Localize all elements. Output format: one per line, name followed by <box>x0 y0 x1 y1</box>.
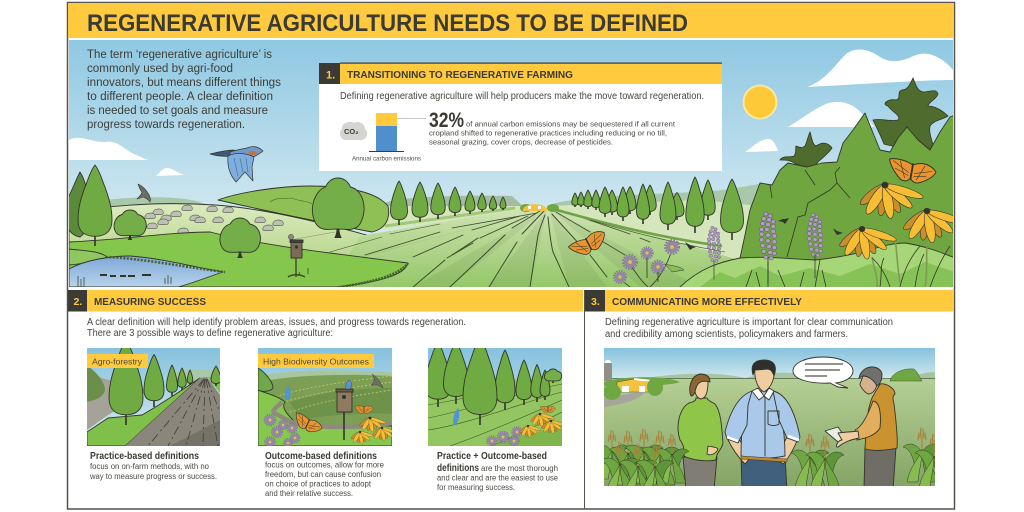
hedge inner lines <box>770 167 850 257</box>
far barn <box>520 204 559 212</box>
number badge 1 <box>319 63 340 84</box>
lead text 3: Defining regenerative agriculture is important for clear communication <box>605 317 893 328</box>
caption: outcome-based: focus on outcomes, allow for more <box>265 460 384 470</box>
lead text 2 <box>87 317 466 339</box>
lead text 2: There are 3 possible ways to define regenerative agriculture: <box>87 328 333 339</box>
person: man in blue shirt <box>725 360 800 490</box>
panel: farm landscape scene <box>68 40 964 290</box>
black-eyed susans <box>746 181 964 287</box>
icon: CO2 cloud <box>340 122 367 140</box>
icon: CO2 cloud: CO₂ <box>344 127 359 136</box>
poplar row left <box>390 181 506 225</box>
person: woman in green sweater <box>678 374 723 490</box>
panel 3: communicating <box>585 290 954 498</box>
stat: 32 percent: of annual carbon emissions may be sequestered if all current <box>466 120 676 128</box>
lead text 3: and credibility among scientists, policymakers and farmers. <box>605 329 848 340</box>
swallow <box>137 184 150 202</box>
dark oak silhouettes <box>780 78 948 170</box>
intro text: to different people. A clear definition <box>87 89 273 103</box>
illustration: practice plus outcome <box>428 348 562 446</box>
number badge 2 <box>68 290 87 312</box>
intro text: commonly used by agri-food <box>87 61 233 75</box>
number badge 3: 3. <box>591 296 600 308</box>
lead text 1: Defining regenerative agriculture will help producers make the move toward regeneration. <box>340 91 704 102</box>
lead text 3 <box>605 317 893 340</box>
small dark insects <box>685 218 843 250</box>
illustration: three people in a corn field <box>604 348 935 486</box>
intro text: innovators, but means different things <box>87 75 281 89</box>
nest box with bird <box>288 234 305 277</box>
tag: agro-forestry: Agro-forestry <box>92 356 143 366</box>
intro text: is needed to set goals and measure <box>87 103 268 117</box>
panel 2: measuring success <box>68 290 583 498</box>
large green hedge <box>740 112 953 260</box>
caption: outcome-based: and their relative success. <box>265 489 353 498</box>
crop rows <box>606 392 935 428</box>
farm buildings <box>603 360 922 407</box>
intro text: The term ‘regenerative agriculture’ is <box>87 47 272 61</box>
purple asters <box>614 240 684 287</box>
heading 3: COMMUNICATING MORE EFFECTIVELY <box>612 296 802 308</box>
title band <box>68 3 954 38</box>
poplar row right <box>572 177 744 240</box>
caption: practice plus outcome: for measuring success. <box>437 483 515 492</box>
number badge 3 <box>585 290 605 312</box>
caption: practice-based <box>89 451 217 481</box>
number badge 2: 2. <box>74 296 82 308</box>
caption: practice plus outcome: Practice + Outcome-based <box>437 451 547 462</box>
intro text: progress towards regeneration. <box>87 117 245 131</box>
number badge 1: 1. <box>326 70 335 82</box>
sun <box>742 84 778 120</box>
caption: practice plus outcome: and clear and are the easiest to use <box>437 474 558 482</box>
distant hills <box>69 184 760 215</box>
stat: 32 percent: 32% <box>429 108 464 132</box>
intro text <box>87 47 281 131</box>
foreground grass <box>680 243 955 290</box>
monarch butterflies <box>568 158 937 260</box>
heading 1: TRANSITIONING TO REGENERATIVE FARMING <box>347 69 573 81</box>
caption: practice plus outcome: definitions <box>437 463 479 474</box>
stat: 32 percent: seasonal grazing, cover crops, decrease of pesticides. <box>429 138 613 146</box>
title: REGENERATIVE AGRICULTURE NEEDS TO BE DEFINED <box>87 10 688 37</box>
caption: practice-based: way to measure progress or success. <box>89 472 217 481</box>
bar chart: annual carbon emissions <box>352 113 426 162</box>
panel 1: transitioning <box>319 62 722 171</box>
caption: practice plus outcome <box>437 451 558 492</box>
caption: outcome-based <box>265 451 384 498</box>
sheep meadow <box>69 203 368 255</box>
caption: outcome-based: Outcome-based definitions <box>265 451 377 462</box>
purple spike flowers <box>707 212 823 283</box>
caption: practice-based: Practice-based definitions <box>90 451 199 462</box>
speech bubble <box>793 357 853 388</box>
illustration: high biodiversity <box>258 348 397 447</box>
caption: practice-based: focus on on-farm methods, with no <box>90 462 210 471</box>
heading 2: MEASURING SUCCESS <box>94 296 206 308</box>
caption: practice plus outcome: are the most thorough <box>481 464 558 473</box>
caption: outcome-based: freedom, but can cause confusion <box>265 470 381 479</box>
far field bands <box>380 200 750 264</box>
tag: high biodiversity outcomes: High Biodiversity Outcomes <box>263 356 369 366</box>
field with rows <box>290 208 745 287</box>
illustration: agro-forestry <box>87 348 220 446</box>
corn plants <box>604 428 935 486</box>
blue bird <box>210 147 263 182</box>
lead text 2: A clear definition will help identify problem areas, issues, and progress towards regeneration. <box>87 317 466 328</box>
trees left and middle <box>68 165 364 258</box>
caption: outcome-based: on choice of practices to adopt <box>265 480 372 488</box>
person: adviser with tablet <box>825 367 897 490</box>
sheep <box>144 204 284 233</box>
green hill <box>218 186 389 232</box>
bar chart: annual carbon emissions: Annual carbon emissions <box>352 156 421 162</box>
clouds <box>69 49 953 176</box>
stat: 32 percent <box>429 108 676 146</box>
stat: 32 percent: cropland shifted to regenerative practices including reducing or no till, <box>429 128 667 138</box>
grass bank and pond <box>69 232 408 287</box>
